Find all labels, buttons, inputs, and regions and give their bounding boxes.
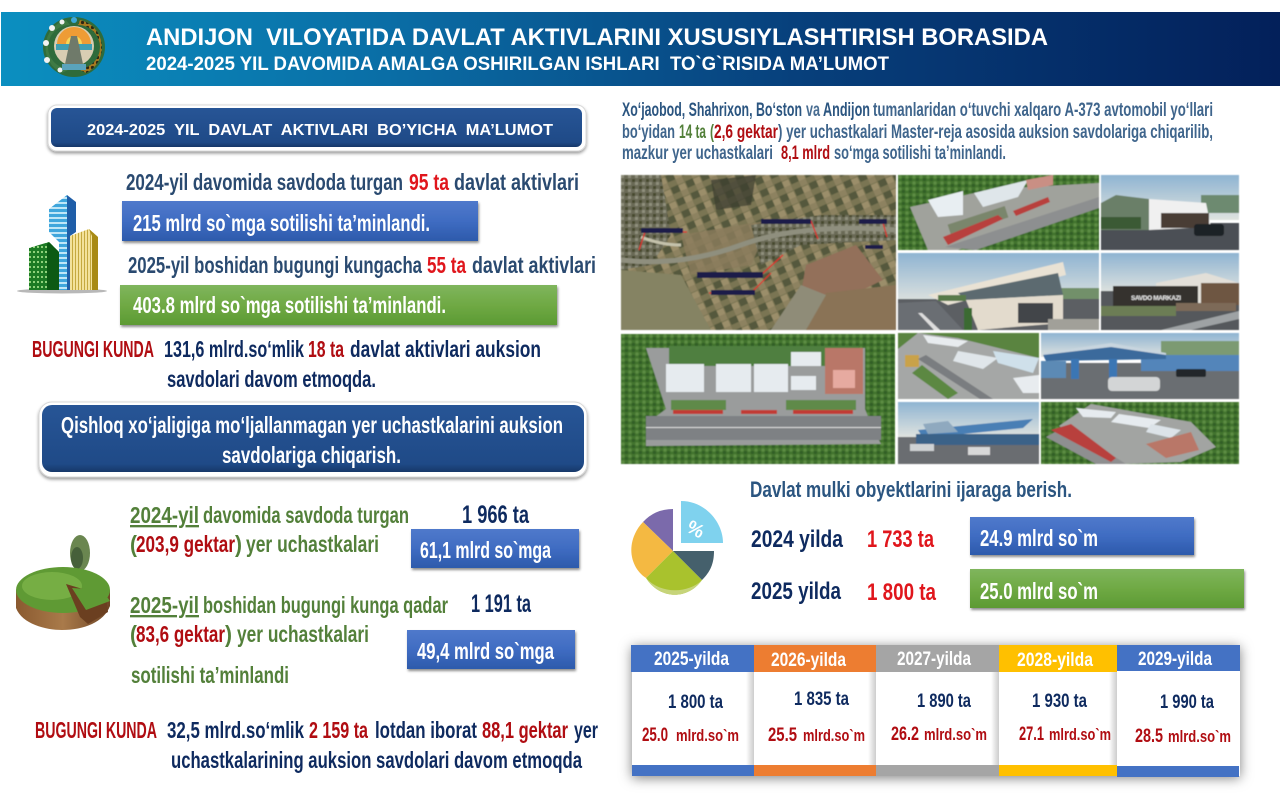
column: 2029: [1117, 645, 1240, 777]
text: 2024 yer: ): [235, 531, 242, 557]
icon: state emblem: [43, 17, 105, 77]
bar: 403.8 mlrd: [120, 285, 557, 325]
bar: 403.8 mlrd: 403.8 mlrd so`mga sotilishi ta’minlandi.: [133, 292, 446, 318]
text: 2024 yer: yer uchastkalari: [246, 531, 379, 557]
column: 2028: mlrd.so`m: [1049, 726, 1111, 744]
column: 2025: 25.0: [642, 724, 668, 746]
column: 2025: [631, 645, 754, 776]
column: 2025: mlrd.so`m: [676, 727, 739, 745]
image: top plan render: [620, 333, 896, 465]
text: bugungi kunda yer: yer: [574, 717, 598, 743]
image: aerial render of complex: [897, 174, 1100, 251]
bar: 49,4 mlrd: [407, 630, 575, 669]
text block: A-373 paragraph: [622, 100, 1213, 164]
title: [146, 24, 1048, 75]
title: ANDIJON VILOYATIDA DAVLAT AKTIVLARINI XUSUSIYLASHTIRISH BORASIDA: [146, 24, 1048, 51]
text: bugungi kunda yer: 2 159 ta: [309, 717, 369, 743]
text block: A-373 paragraph: bo‘yidan: [622, 122, 675, 143]
text: bugungi kunda yer: [35, 717, 598, 773]
text: 2025 aktivlari: davlat aktivlari: [472, 252, 596, 278]
image: savdo markazi sign: SAVDO MARKAZI: [1131, 295, 1181, 302]
text block: A-373 paragraph: Xo‘jaobod, Shahrixon, Bo‘ston: [622, 100, 802, 121]
text: bugungi kunda yer: 32,5 mlrd.so‘mlik: [167, 717, 305, 743]
row: rent 2025: [751, 569, 1244, 608]
text block: A-373 paragraph: 14 ta: [679, 122, 706, 143]
image: aerial render reverse: [1040, 401, 1240, 465]
bar: 61,1 mlrd: [411, 529, 579, 568]
text block: A-373 paragraph: Andijon: [823, 100, 870, 121]
image: fuel station and car: [1040, 332, 1240, 400]
column: 2025: 2025-yilda: [654, 648, 729, 670]
bar: 25.0 mlrd: 25.0 mlrd so`m: [980, 578, 1098, 604]
text: bugungi kunda yer: 88,1 gektar: [482, 717, 568, 743]
column: 2027: mlrd.so`m: [924, 726, 987, 744]
text: 2025 yer: (: [130, 621, 137, 647]
icon: pie chart: [631, 501, 723, 595]
text: 2025 aktivlari: 2025-yil boshidan bugungi kungacha: [128, 252, 423, 278]
photo collage: [621, 175, 1239, 464]
column: 2028: 1 930 ta: [1032, 690, 1087, 712]
text block: A-373 paragraph: va: [806, 100, 820, 121]
bar: 24.9 mlrd: [970, 517, 1194, 555]
row: rent 2024: 2024 yilda: [751, 526, 843, 553]
text: 2025 yer: yer uchastkalari: [237, 621, 369, 647]
table: forecast 2025-2029: [631, 645, 1240, 777]
bar: 49,4 mlrd: 49,4 mlrd so`mga: [417, 638, 555, 664]
panel: davlat aktivlari: [17, 105, 596, 392]
column: 2028: 27.1: [1019, 723, 1044, 745]
text: 2024 aktivlari: 95 ta: [409, 169, 450, 195]
text block: A-373 paragraph: 8,1 mlrd: [781, 143, 830, 164]
column: 2027: 26.2: [891, 723, 919, 745]
column: 2029: 1 990 ta: [1160, 691, 1214, 713]
heading banner: yer uchastkalari: Qishloq xo‘jaligiga mo‘ljallanmagan yer uchastkalarini auksion: [61, 412, 563, 438]
column: 2025: 1 800 ta: [668, 691, 723, 713]
icon: pie chart: %: [683, 517, 708, 543]
text: bugungi kunda yer: uchastkalarining auksion savdolari davom etmoqda: [171, 747, 583, 773]
heading: ijaraga berish: Davlat mulki obyektlarini ijaraga berish.: [750, 477, 1072, 502]
text: 2025 yer: 2025-yil: [130, 592, 199, 618]
image: shopping centre front: [897, 252, 1100, 331]
text block: A-373 paragraph: 2,6 gektar: [714, 122, 778, 143]
text block: A-373 paragraph: (: [710, 122, 714, 143]
text block: A-373 paragraph: so‘mga sotilishi ta’minlandi.: [834, 143, 1006, 164]
row: rent 2024: [751, 517, 1194, 555]
column: 2027: 2027-yilda: [897, 648, 971, 670]
bar: 25.0 mlrd: [970, 569, 1244, 608]
bar: 215 mlrd: 215 mlrd so`mga sotilishi ta’minlandi.: [133, 210, 430, 236]
column: 2026: 1 835 ta: [794, 688, 849, 710]
text: bugungi kunda aktivlar: savdolari davom etmoqda.: [167, 366, 376, 392]
heading banner: davlat aktivlari: [48, 105, 586, 151]
text: bugungi kunda aktivlar: [32, 336, 541, 392]
text: bugungi kunda aktivlar: 18 ta: [308, 336, 345, 362]
text: 2025 yer: sotilishi ta’minlandi: [131, 662, 289, 688]
title: 2024-2025 YIL DAVOMIDA AMALGA OSHIRILGAN ISHLARI TO`G`RISIDA MA’LUMOT: [146, 53, 889, 75]
bar: 215 mlrd: [122, 201, 478, 241]
text: 2025 yer: [130, 592, 448, 688]
column: 2027: [876, 645, 999, 776]
panel: yer uchastkalari: [16, 402, 598, 773]
column: 2028: [999, 645, 1117, 776]
image: building with car: [1100, 174, 1240, 251]
text: bugungi kunda aktivlar: 131,6 mlrd.so‘mlik: [164, 336, 305, 362]
heading banner: davlat aktivlari: 2024-2025 YIL DAVLAT AKTIVLARI BO’YICHA MA’LUMOT: [87, 122, 554, 139]
text: bugungi kunda yer: BUGUNGI KUNDA: [35, 717, 157, 743]
column: 2026: mlrd.so`m: [803, 727, 865, 745]
row: rent 2025: 1 800 ta: [867, 579, 936, 606]
column: 2028: 2028-yilda: [1017, 649, 1093, 671]
value: 1 191 ta: 1 191 ta: [471, 590, 532, 618]
column: 2026: 25.5: [768, 724, 797, 746]
bar: 24.9 mlrd: 24.9 mlrd so`m: [980, 525, 1098, 551]
header band: [1, 12, 1280, 86]
text: 2024 yer: [130, 502, 409, 557]
image: savdo markazi sign: [1100, 252, 1240, 331]
value: 1 966 ta: 1 966 ta: [462, 501, 530, 529]
bar: 61,1 mlrd: 61,1 mlrd so`mga: [420, 537, 552, 563]
column: 2029: 28.5: [1135, 725, 1163, 747]
text: bugungi kunda aktivlar: BUGUNGI KUNDA: [32, 336, 154, 362]
text: 2025 aktivlari: 55 ta: [427, 252, 467, 278]
icon: land plot with tree: [16, 535, 110, 630]
heading banner: yer uchastkalari: savdolariga chiqarish.: [222, 442, 401, 468]
column: 2029: mlrd.so`m: [1168, 728, 1231, 746]
row: rent 2025: 2025 yilda: [751, 578, 841, 605]
image: fuel station canopy: [897, 401, 1040, 465]
text: 2025 yer: ): [225, 621, 232, 647]
image: aerial angled render: [897, 332, 1040, 400]
text: 2024 yer: davomida savdoda turgan: [203, 502, 409, 528]
text: 2024 aktivlari: 2024-yil davomida savdoda turgan: [126, 169, 403, 195]
column: 2029: 2029-yilda: [1138, 648, 1212, 670]
text: bugungi kunda aktivlar: davlat aktivlari auksion: [350, 336, 541, 362]
column: 2027: 1 890 ta: [917, 690, 971, 712]
row: rent 2024: 1 733 ta: [867, 526, 934, 553]
text: 2024 aktivlari: davlat aktivlari: [454, 169, 579, 195]
text: 2024 yer: 2024-yil: [130, 502, 199, 528]
text: 2024 yer: (: [130, 531, 137, 557]
text: bugungi kunda yer: lotdan iborat: [375, 717, 477, 743]
text: 2024 yer: 203,9 gektar: [136, 531, 235, 557]
icon: city buildings: [17, 195, 107, 294]
image: satellite map: [620, 174, 897, 331]
text block: A-373 paragraph: mazkur yer uchastkalari: [622, 143, 773, 164]
column: 2026: [754, 645, 876, 776]
heading banner: yer uchastkalari: [39, 402, 587, 477]
text: 2025 yer: 83,6 gektar: [136, 621, 225, 647]
column: 2026: 2026-yilda: [771, 649, 846, 671]
text: 2025 yer: boshidan bugungi kunga qadar: [203, 592, 448, 618]
